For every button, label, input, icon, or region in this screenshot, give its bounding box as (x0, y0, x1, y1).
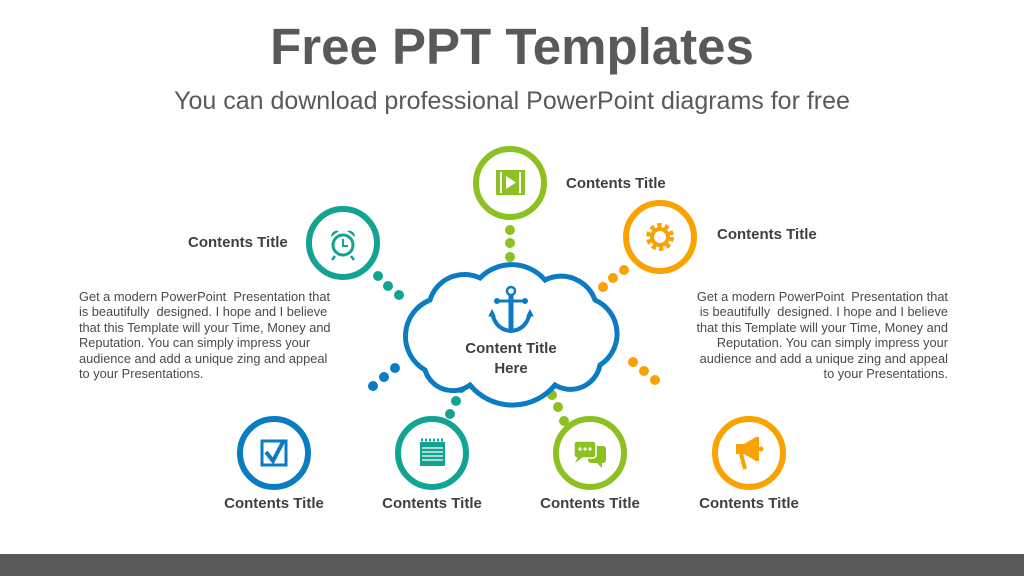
text block: right: to your Presentations. (824, 366, 948, 381)
footer bar (0, 554, 1024, 576)
text block: right: Get a modern PowerPoint Presentation that (697, 289, 948, 304)
text block: left: Get a modern PowerPoint Presentation that (79, 289, 330, 304)
dots: green top (505, 225, 515, 262)
cloud: Here (494, 360, 528, 377)
circle: checkbox (blue) (240, 419, 308, 487)
cloud text: Content Title (465, 340, 557, 357)
label: top: Contents Title (566, 175, 666, 192)
dots: blue lower-left (368, 363, 400, 391)
text block: right: is beautifully designed. I hope and I believe (700, 304, 948, 319)
text block: left: audience and add a unique zing and appeal (79, 351, 327, 366)
text block: left: to your Presentations. (79, 366, 203, 381)
title: Free PPT Templates (270, 18, 754, 75)
text block: left (79, 289, 331, 381)
circle: megaphone (orange) (715, 419, 783, 487)
icon: anchor (489, 287, 533, 331)
circle: notepad (teal) (398, 419, 466, 487)
dots: green bottom (547, 390, 569, 426)
dots: orange upper-right (598, 265, 629, 292)
label: upper-left: Contents Title (188, 234, 288, 251)
label: bottom 3: Contents Title (540, 495, 640, 512)
circle: clock (teal) (309, 209, 377, 277)
label: bottom 2: Contents Title (382, 495, 482, 512)
text block: right: audience and add a unique zing and appeal (700, 351, 948, 366)
circle: video (green top) (476, 149, 544, 217)
dots: teal upper-left (373, 271, 404, 300)
text block: left: that this Template will your Time, Money and (79, 320, 331, 335)
circle: chat (green) (556, 419, 624, 487)
text block: left: Reputation. You can simply impress your (79, 335, 310, 350)
circle: gear (orange) (626, 203, 694, 271)
text block: right: Reputation. You can simply impress your (717, 335, 948, 350)
label: upper-right: Contents Title (717, 226, 817, 243)
text block: right: that this Template will your Time, Money and (696, 320, 948, 335)
text block: left: is beautifully designed. I hope and I believe (79, 304, 327, 319)
label: bottom 1: Contents Title (224, 495, 324, 512)
cloud (405, 265, 617, 405)
dots: orange lower-right (628, 357, 660, 385)
text block: right (696, 289, 948, 381)
dots: teal bottom (445, 383, 466, 419)
subtitle: You can download professional PowerPoint diagrams for free (174, 87, 850, 115)
label: bottom 4: Contents Title (699, 495, 799, 512)
